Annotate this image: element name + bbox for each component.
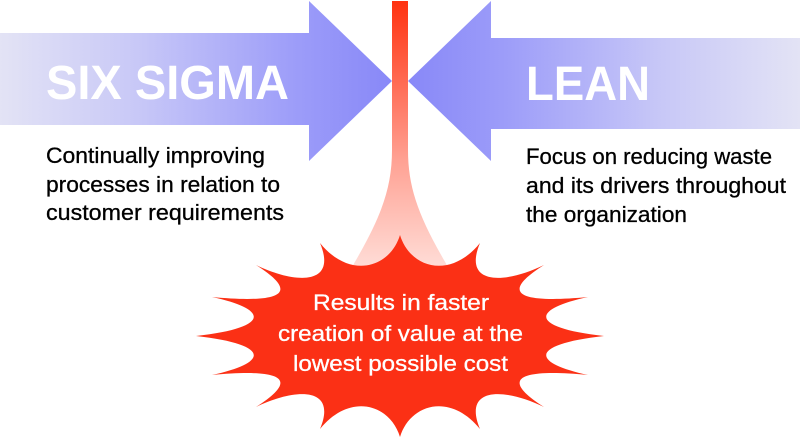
text: six sigma description xyxy=(46,143,284,225)
text: result: Results in faster xyxy=(313,290,489,315)
converging stem xyxy=(349,1,451,272)
text: result: creation of value at the xyxy=(278,321,523,346)
heading: six sigma: SIX SIGMA xyxy=(46,57,289,110)
arrow: six sigma xyxy=(0,1,392,161)
arrow: lean xyxy=(408,1,800,161)
text: lean description: and its drivers throughout xyxy=(526,173,786,198)
text: six sigma description: processes in relation to xyxy=(46,172,280,197)
text: six sigma description: customer requirements xyxy=(46,200,284,225)
text: lean description: Focus on reducing waste xyxy=(526,144,772,169)
text: lean description xyxy=(526,144,786,227)
heading: lean: LEAN xyxy=(526,58,650,111)
starburst xyxy=(196,235,604,437)
text: lean description: the organization xyxy=(526,202,687,227)
text: result: lowest possible cost xyxy=(293,351,508,376)
text: result xyxy=(278,290,523,376)
text: six sigma description: Continually improving xyxy=(46,143,265,168)
